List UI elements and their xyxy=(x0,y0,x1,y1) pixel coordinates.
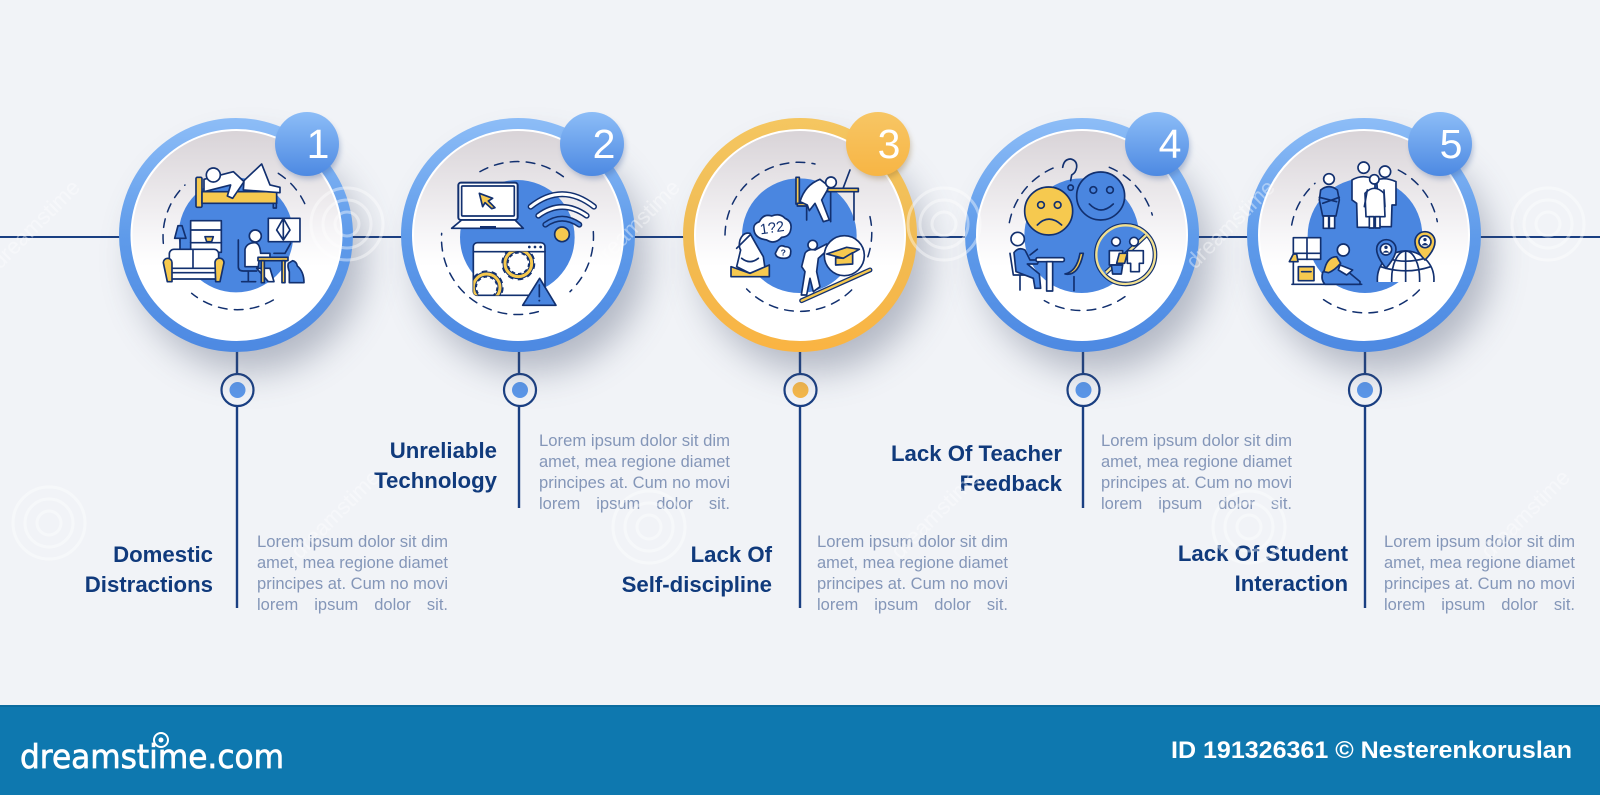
description 3: lorem ipsum dolor sit. xyxy=(817,596,1008,614)
circle badge 5: 5 xyxy=(1440,121,1462,167)
heading: lack of student interaction: Lack Of Student xyxy=(1178,541,1349,566)
step 4: lack of teacher feedback xyxy=(891,112,1292,513)
footer logo: dreamstime.com xyxy=(20,737,284,776)
description 1: Lorem ipsum dolor sit dim xyxy=(257,533,448,551)
heading: lack of teacher feedback: Lack Of Teacher xyxy=(891,441,1062,466)
description 2: lorem ipsum dolor sit. xyxy=(539,495,730,513)
icon: teacher feedback xyxy=(1009,159,1155,311)
description 3 xyxy=(817,533,1008,614)
description 5: Lorem ipsum dolor sit dim xyxy=(1384,533,1575,551)
circle badge 1: 1 xyxy=(307,121,329,167)
thought bubble text: 1?2 xyxy=(759,219,785,238)
step 1: domestic distractions xyxy=(85,112,448,614)
step 2: unreliable technology xyxy=(374,112,730,513)
description 2: principes at. Cum no movi xyxy=(539,474,730,492)
footer bar xyxy=(0,705,1600,795)
heading: lack of student interaction: Interaction xyxy=(1235,571,1348,596)
description 2: amet, mea regione diamet xyxy=(539,453,730,471)
vertical connector 3 xyxy=(784,350,816,608)
circle badge 4: 4 xyxy=(1159,121,1181,167)
description 4: Lorem ipsum dolor sit dim xyxy=(1101,432,1292,450)
heading: domestic distractions: Domestic xyxy=(113,542,213,567)
heading: unreliable technology: Unreliable xyxy=(390,438,497,463)
icon: technology problems xyxy=(441,162,594,315)
footer credit: ID 191326361 © Nesterenkoruslan xyxy=(1171,737,1572,764)
vertical connector 2 xyxy=(504,350,536,508)
description 4 xyxy=(1101,432,1292,513)
description 1 xyxy=(257,533,448,614)
description 1: lorem ipsum dolor sit. xyxy=(257,596,448,614)
step 5: lack of student interaction xyxy=(1178,112,1575,614)
watermark overlay: dreamstime xyxy=(286,465,385,564)
description 2 xyxy=(539,432,730,513)
circle badge 2 xyxy=(401,112,646,372)
description 5: lorem ipsum dolor sit. xyxy=(1384,596,1575,614)
watermark overlay xyxy=(0,175,1584,564)
description 4: amet, mea regione diamet xyxy=(1101,453,1292,471)
heading: domestic distractions: Distractions xyxy=(85,572,213,597)
circle badge 1 xyxy=(119,112,364,372)
step 3: lack of self-discipline xyxy=(622,112,1008,614)
circle badge 5 xyxy=(1247,112,1492,372)
heading: lack of self-discipline: Lack Of xyxy=(691,542,773,567)
description 5: amet, mea regione diamet xyxy=(1384,554,1575,572)
icon: lack of discipline xyxy=(725,162,872,311)
circle badge 3 xyxy=(683,112,928,372)
circle badge 4 xyxy=(965,112,1210,372)
description 3: amet, mea regione diamet xyxy=(817,554,1008,572)
watermark overlay: dreamstime xyxy=(1181,175,1280,274)
circle badge 3: 3 xyxy=(878,121,900,167)
heading: lack of self-discipline: Self-discipline xyxy=(622,572,772,597)
horizontal timeline xyxy=(0,236,1600,238)
icon: lack of discipline: ? xyxy=(781,248,786,258)
heading: lack of teacher feedback: Feedback xyxy=(960,471,1063,496)
watermark overlay: dreamstime xyxy=(1476,465,1575,564)
watermark overlay: dreamstime xyxy=(586,175,685,274)
description 5: principes at. Cum no movi xyxy=(1384,575,1575,593)
icon: student isolation xyxy=(1289,162,1437,313)
description 1: principes at. Cum no movi xyxy=(257,575,448,593)
vertical connector 1 xyxy=(222,350,254,608)
heading: unreliable technology: Technology xyxy=(374,468,498,493)
description 4: principes at. Cum no movi xyxy=(1101,474,1292,492)
description 5 xyxy=(1384,533,1575,614)
description 1: amet, mea regione diamet xyxy=(257,554,448,572)
description 4: lorem ipsum dolor sit. xyxy=(1101,495,1292,513)
description 3: principes at. Cum no movi xyxy=(817,575,1008,593)
watermark overlay: dreamstime xyxy=(886,465,985,564)
description 3: Lorem ipsum dolor sit dim xyxy=(817,533,1008,551)
icon: home distractions xyxy=(163,164,307,310)
vertical connector 4 xyxy=(1068,350,1100,508)
vertical connector 5 xyxy=(1349,350,1381,608)
description 2: Lorem ipsum dolor sit dim xyxy=(539,432,730,450)
circle badge 2: 2 xyxy=(593,121,615,167)
